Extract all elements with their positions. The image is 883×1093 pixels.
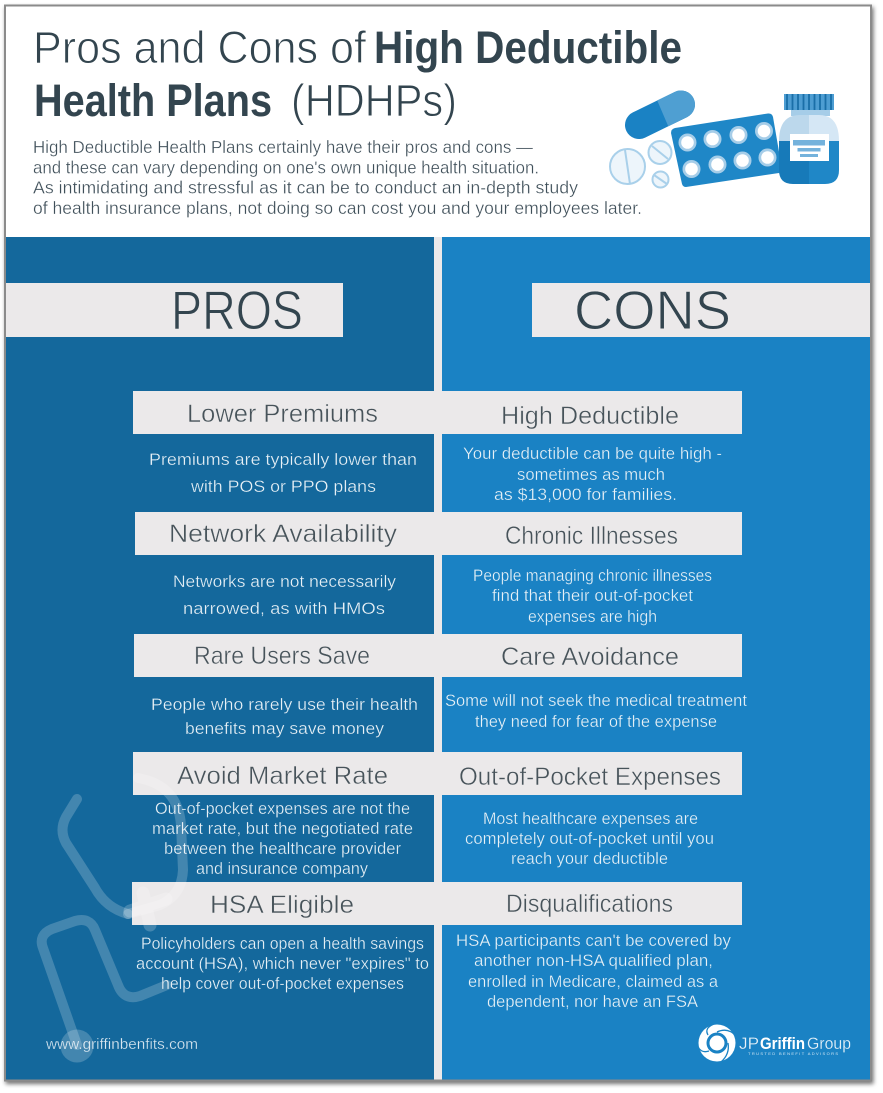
con 2: chronic illnesses (442, 512, 742, 626)
cons heading band: CONS (574, 279, 731, 341)
con 4: out-of-pocket expenses: completely out-of-pocket until you (465, 830, 714, 848)
title: High Deductible (374, 22, 682, 73)
con 2: chronic illnesses: expenses are high (528, 608, 657, 626)
con 5: disqualifications: HSA participants can't be covered by (456, 932, 732, 950)
pro 4: avoid market rate: market rate, but the negotiated rate (152, 820, 413, 838)
icon: capsule (639, 104, 681, 125)
con 4: out-of-pocket expenses: Out-of-Pocket Expenses (459, 763, 721, 791)
con 4: out-of-pocket expenses: Most healthcare expenses are (483, 810, 698, 828)
pros heading band (6, 279, 343, 341)
icon: stethoscope watermark (42, 778, 183, 1062)
con 4: out-of-pocket expenses: reach your deductible (511, 850, 668, 868)
panel: cons (442, 237, 870, 1080)
logo: JP Griffin Group: JP (739, 1035, 759, 1053)
con 1: high deductible: as $13,000 for families. (494, 486, 677, 504)
con 5: disqualifications: another non-HSA qualified plan, (474, 952, 713, 970)
logo: JP Griffin Group (697, 1024, 851, 1062)
panel: pros (6, 237, 434, 1080)
con 2: chronic illnesses: Chronic Illnesses (505, 522, 678, 550)
con 4: out-of-pocket expenses (442, 752, 742, 868)
pro 3: rare users save: People who rarely use their health (151, 696, 418, 714)
intro paragraph: As intimidating and stressful as it can be to conduct an in-depth study (33, 178, 578, 198)
pro 5: hsa eligible: Policyholders can open a health savings (141, 935, 424, 953)
pro 1: lower premiums: Premiums are typically lower than (149, 451, 417, 469)
con 1: high deductible: High Deductible (501, 402, 679, 430)
pro 4: avoid market rate (133, 752, 434, 878)
pro 5: hsa eligible: account (HSA), which never "expires" to (136, 955, 429, 973)
con 2: chronic illnesses: People managing chronic illnesses (473, 567, 712, 585)
pro 3: rare users save (134, 634, 434, 738)
title: Pros and Cons of (33, 22, 366, 73)
website url: www.griffinbenfits.com (45, 1037, 198, 1053)
pro 2: network availability: narrowed, as with HMOs (183, 600, 385, 618)
title: Health Plans (34, 75, 272, 126)
title: (HDHPs) (291, 75, 457, 126)
pro 4: avoid market rate: Out-of-pocket expenses are not the (155, 800, 410, 818)
pro 4: avoid market rate: Avoid Market Rate (177, 762, 388, 790)
con 1: high deductible: Your deductible can be quite high - (463, 445, 722, 463)
pro 3: rare users save: benefits may save money (185, 720, 385, 738)
icon: blister pack (671, 113, 782, 187)
con 5: disqualifications: dependent, nor have an FSA (487, 993, 698, 1011)
pro 4: avoid market rate: between the healthcare provider (164, 840, 401, 858)
intro paragraph: High Deductible Health Plans certainly have their pros and cons — (33, 137, 533, 157)
title (33, 22, 682, 126)
con 5: disqualifications: enrolled in Medicare, claimed as a (468, 973, 719, 991)
intro paragraph: and these can vary depending on one's own unique health situation. (33, 158, 539, 178)
con 1: high deductible: sometimes as much (517, 466, 665, 484)
logo: JP Griffin Group: Group (807, 1035, 851, 1053)
con 2: chronic illnesses: find that their out-of-pocket (492, 587, 693, 605)
pro 2: network availability: Networks are not necessarily (173, 573, 397, 591)
con 5: disqualifications (442, 882, 742, 1011)
logo: JP Griffin Group: TRUSTED BENEFIT ADVISORS (748, 1051, 838, 1056)
pro 5: hsa eligible: HSA Eligible (210, 891, 354, 919)
con 1: high deductible (442, 391, 742, 504)
pro 2: network availability (135, 512, 434, 618)
pro 1: lower premiums: with POS or PPO plans (190, 478, 376, 496)
intro paragraph: of health insurance plans, not doing so can cost you and your employees later. (33, 198, 642, 218)
pro 1: lower premiums: Lower Premiums (187, 400, 378, 428)
pro 5: hsa eligible (132, 882, 434, 993)
header panel (6, 6, 870, 237)
pro 2: network availability: Network Availability (169, 520, 398, 548)
con 3: care avoidance: they need for fear of the expense (475, 713, 717, 731)
con 5: disqualifications: Disqualifications (506, 890, 673, 918)
con 3: care avoidance (442, 634, 747, 731)
intro paragraph (33, 137, 642, 218)
pros heading band: PROS (171, 279, 303, 341)
con 3: care avoidance: Care Avoidance (501, 643, 679, 671)
icon: swirl (697, 1024, 736, 1062)
pro 5: hsa eligible: help cover out-of-pocket expenses (161, 975, 404, 993)
pro 3: rare users save: Rare Users Save (194, 642, 370, 670)
cons heading band (532, 279, 870, 341)
con 3: care avoidance: Some will not seek the medical treatment (445, 692, 747, 710)
icon: tablets (610, 141, 672, 188)
logo: JP Griffin Group: Griffin (760, 1035, 805, 1053)
pro 1: lower premiums (133, 391, 434, 496)
icon: pill bottle (779, 94, 839, 184)
pro 4: avoid market rate: and insurance company (196, 860, 369, 878)
icon: medication (610, 94, 839, 188)
